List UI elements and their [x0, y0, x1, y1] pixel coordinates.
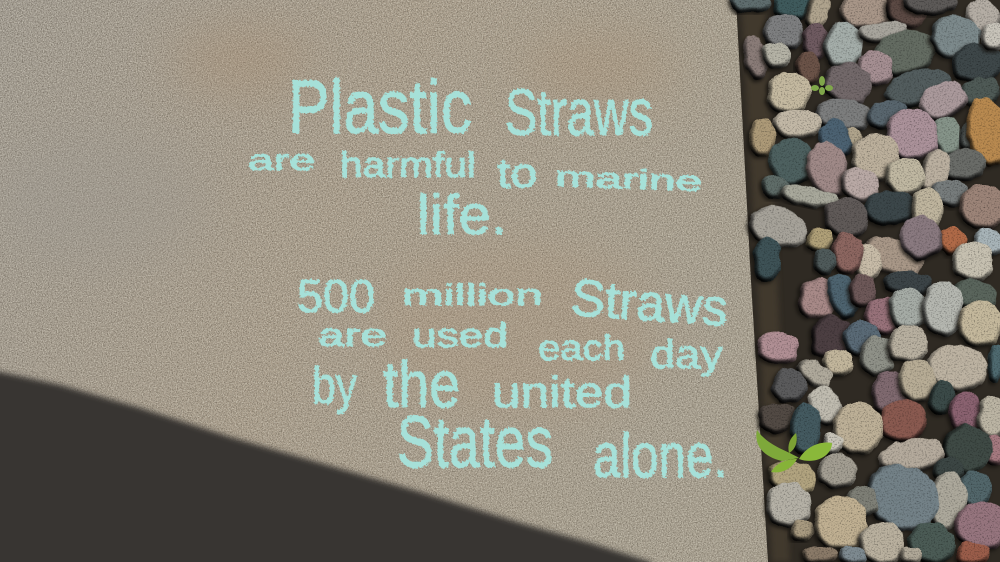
chalk message [248, 65, 730, 491]
dark mulch ground [736, 0, 1000, 562]
heading: Plastic Straws [288, 65, 653, 150]
stones [732, 0, 1000, 562]
text: 500 million straws fact: States [397, 403, 553, 483]
concrete sidewalk [0, 0, 768, 562]
text: 500 million straws fact: the [383, 347, 460, 421]
text: are harmful to marine life.: life. [417, 183, 507, 246]
text: are harmful to marine life.: harmful [340, 144, 476, 185]
text: 500 million straws fact: day [650, 333, 723, 377]
text: 500 million straws fact: are [318, 317, 387, 353]
text: are harmful to marine life.: marine [555, 161, 703, 197]
text: 500 million straws fact: by [312, 357, 357, 415]
text: are harmful to marine life. [248, 144, 703, 246]
icon: green sprout [811, 76, 833, 95]
text: are harmful to marine life.: are [248, 144, 315, 177]
text: are harmful to marine life.: to [497, 149, 537, 196]
shadow across the sidewalk [0, 366, 670, 562]
text: 500 million straws fact: Straws [569, 269, 730, 338]
text: 500 million straws fact: million [402, 279, 543, 312]
text: 500 million straws fact: used [412, 317, 508, 355]
text: 500 million straws fact: each [538, 327, 625, 368]
rock bed [732, 0, 1000, 562]
text: 500 million straws fact [297, 269, 730, 491]
text: 500 million straws fact: alone. [593, 422, 727, 491]
heading: Plastic Straws: Straws [505, 75, 653, 149]
text: 500 million straws fact: 500 [297, 270, 375, 322]
heading: Plastic Straws: Plastic [288, 65, 472, 150]
icon: green weed leaves [756, 430, 832, 472]
text: 500 million straws fact: united [492, 368, 632, 417]
mulch edge debris [741, 0, 790, 562]
